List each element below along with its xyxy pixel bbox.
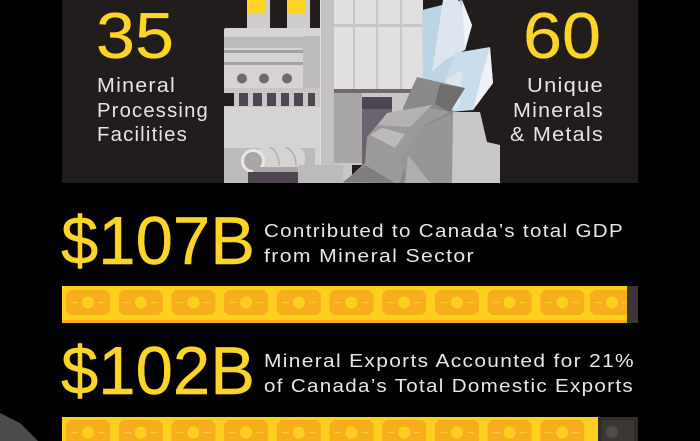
- stat: unique minerals and metals: [510, 0, 604, 146]
- stat: GDP contribution: from Mineral Sector: [264, 245, 475, 266]
- stat: GDP contribution: $107B: [61, 203, 255, 279]
- stat: mineral processing facilities: 35: [96, 0, 174, 72]
- stat: unique minerals and metals: Minerals: [513, 99, 604, 122]
- illustration: processing plant with crystals and rocks: [224, 0, 500, 183]
- bar: GDP money strip: [62, 286, 638, 323]
- stat: mineral exports: of Canada’s Total Domestic Exports: [264, 375, 634, 396]
- stat: GDP contribution: [61, 203, 624, 279]
- rocks: [343, 77, 500, 183]
- tower: [320, 0, 423, 183]
- stat: unique minerals and metals: & Metals: [510, 123, 604, 146]
- crystals: [422, 0, 493, 112]
- stat: mineral processing facilities: Mineral: [97, 74, 176, 97]
- stat: mineral exports: [61, 333, 635, 409]
- panel: top stats: [62, 0, 638, 183]
- corner rock: [0, 413, 38, 441]
- machine block: [224, 28, 322, 183]
- stat: unique minerals and metals: Unique: [527, 74, 604, 97]
- stat: mineral processing facilities: [96, 0, 209, 146]
- stat: GDP contribution: Contributed to Canada’s total GDP: [264, 220, 624, 241]
- stat: mineral exports: Mineral Exports Accounted for 21%: [264, 350, 635, 371]
- stat: mineral processing facilities: Processing: [97, 99, 209, 122]
- stat: unique minerals and metals: 60: [523, 0, 601, 72]
- bar: exports money strip: [62, 417, 638, 441]
- chimneys: [247, 0, 310, 28]
- stat: mineral exports: $102B: [61, 333, 255, 409]
- pipe: [241, 147, 343, 183]
- stat: mineral processing facilities: Facilities: [97, 123, 188, 146]
